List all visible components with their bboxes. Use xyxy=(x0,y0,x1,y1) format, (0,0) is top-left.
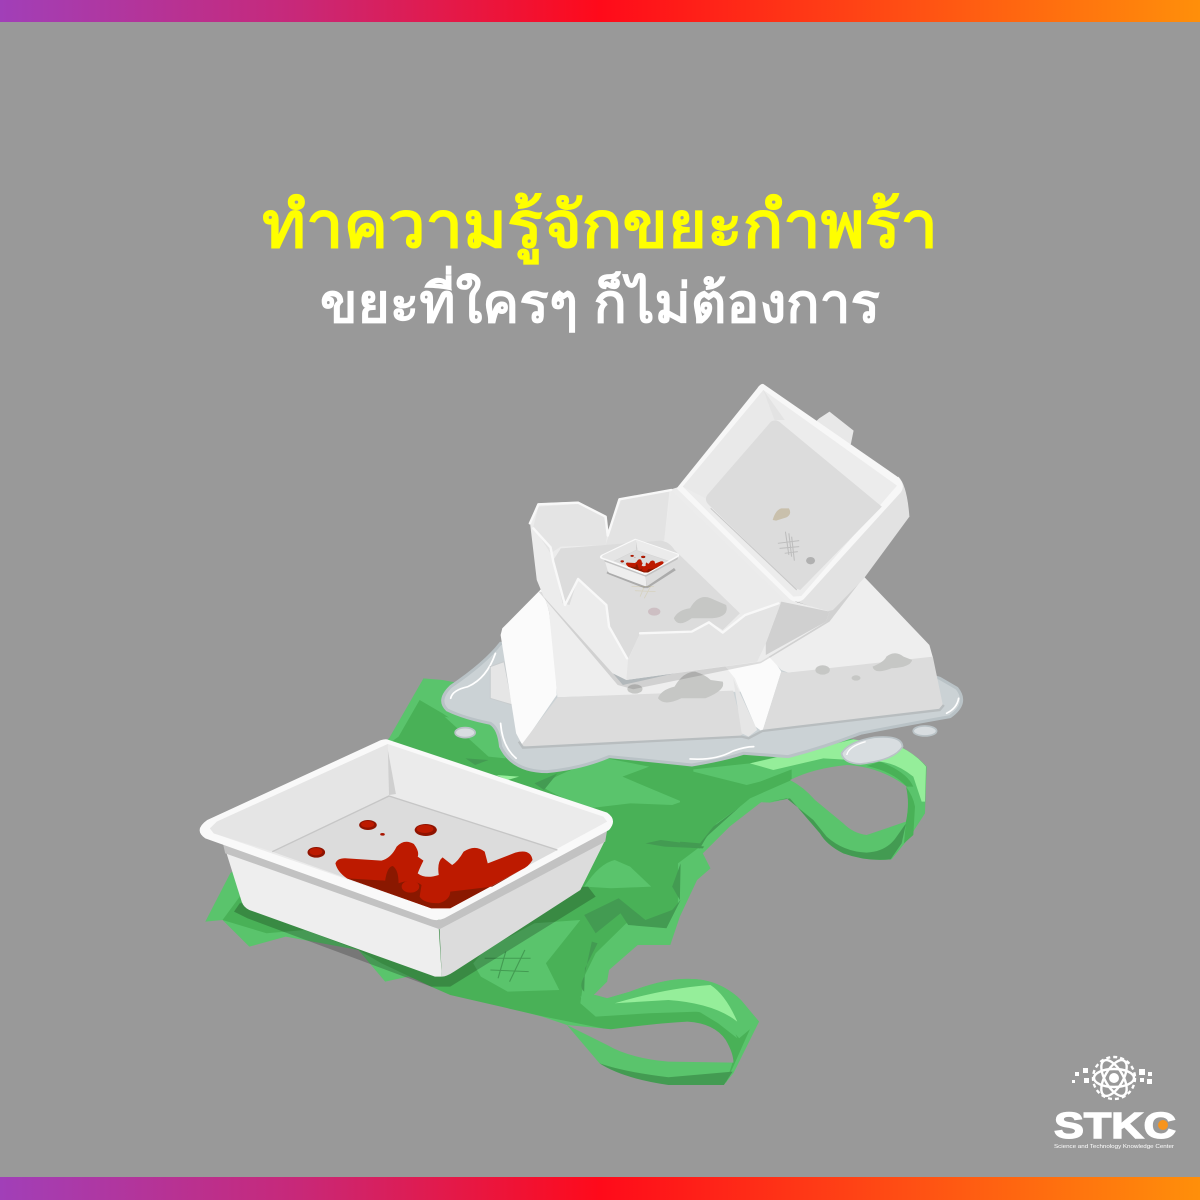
right top face xyxy=(766,577,933,673)
left slope xyxy=(501,588,557,745)
handle hole xyxy=(790,765,908,835)
top gradient bar xyxy=(0,0,1200,22)
base back walls xyxy=(533,504,607,553)
bag dark creases xyxy=(466,758,726,992)
logo tagline: Science and Technology Knowledge Center xyxy=(1054,1144,1174,1150)
base floor xyxy=(553,541,740,659)
right front face xyxy=(762,657,943,732)
lid grey spot xyxy=(806,557,815,564)
top left face xyxy=(542,590,742,697)
lid floor xyxy=(706,420,882,590)
shadow cast on lower box xyxy=(538,576,865,689)
bag light fold patches xyxy=(444,717,682,992)
tab xyxy=(812,412,854,448)
illustration: bottom closed foam box xyxy=(490,577,944,748)
lid scratches xyxy=(778,532,799,561)
base scratches xyxy=(631,587,656,598)
front left face xyxy=(521,691,744,748)
stains xyxy=(627,653,912,702)
bag handle light patch xyxy=(580,979,759,1038)
title xyxy=(262,189,938,334)
back plate xyxy=(490,662,513,705)
lid hinge strip xyxy=(711,508,797,590)
bag right handle xyxy=(680,738,927,860)
base right end xyxy=(766,602,830,655)
bag highlight near tray xyxy=(496,775,519,780)
logo orange dot xyxy=(1158,1120,1168,1130)
bag handle dark underside xyxy=(599,1063,733,1085)
bag scratch marks xyxy=(485,950,531,982)
drop left xyxy=(455,728,475,738)
illustration: spilled liquid puddle xyxy=(443,643,962,772)
bottom gradient bar xyxy=(0,1177,1200,1200)
drop large xyxy=(842,737,903,764)
illustration: open torn foam box xyxy=(530,384,909,689)
lid inner walls xyxy=(677,384,903,602)
atom icon xyxy=(1093,1056,1135,1100)
illustration: large tray with red sauce xyxy=(200,739,613,987)
heading: subtitle: ขยะที่ใครๆ ก็ไม่ต้องการ xyxy=(320,265,880,334)
bag handle highlight xyxy=(615,985,737,1022)
pixel squares xyxy=(1072,1068,1152,1084)
bag handle hole xyxy=(567,1022,733,1063)
heading: main title: ทำความรู้จักขยะกำพร้า xyxy=(262,189,938,265)
lid stain xyxy=(773,508,790,521)
drop right xyxy=(913,726,937,736)
base stains xyxy=(674,597,727,623)
lid outer wall xyxy=(792,477,909,612)
handle highlight xyxy=(750,739,926,802)
base silhouette xyxy=(530,487,830,680)
puddle highlights xyxy=(451,653,959,759)
logo: STKC xyxy=(1054,1056,1176,1150)
torn white edges xyxy=(530,490,779,658)
bag body xyxy=(205,678,841,1085)
center fold xyxy=(723,653,781,732)
logo wordmark: STKC xyxy=(1054,1105,1176,1146)
illustration: small tray with sauce on top xyxy=(600,539,679,588)
illustration: green plastic bag xyxy=(205,678,927,1085)
bottom edge xyxy=(519,705,944,748)
pink spot xyxy=(648,608,660,616)
base front wall xyxy=(626,602,781,680)
